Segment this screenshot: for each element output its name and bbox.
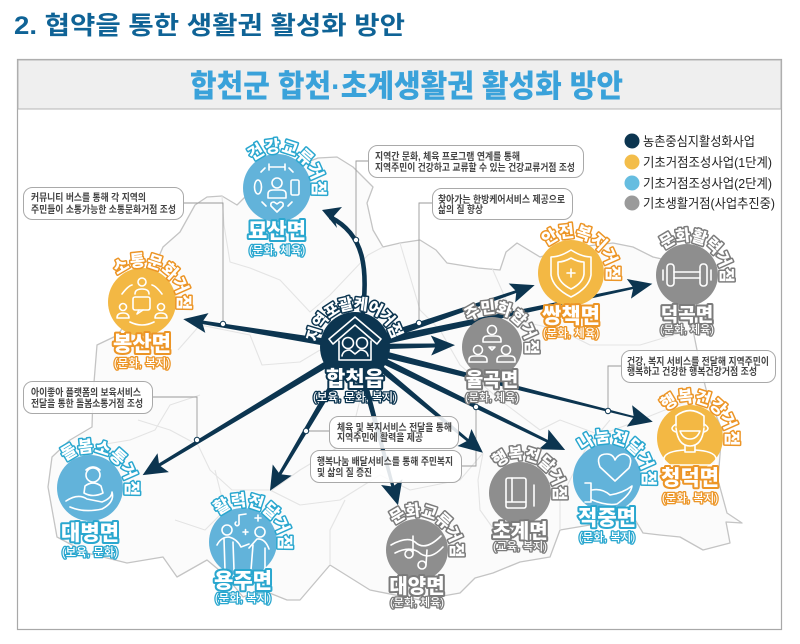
panel header band: 합천군 합천·초계생활권 활성화 방안	[190, 69, 623, 104]
icon: care house	[329, 317, 381, 360]
callout: 활력전달거점	[330, 416, 458, 448]
legend	[624, 134, 775, 211]
icon: music waves	[391, 536, 443, 569]
icon: shield	[551, 250, 591, 297]
panel header band	[18, 60, 781, 109]
arc label: 행복건강거점	[658, 386, 742, 446]
arc label: 행복전달거점	[490, 444, 569, 501]
callout: 행복건강거점: 행복하고 건강한 행복건강거점 조성	[627, 365, 757, 378]
node: 봉산면	[108, 250, 194, 371]
icon: three residents	[469, 326, 515, 362]
legend: 기초거점조성사업(1단계)	[643, 155, 772, 170]
icon: heart in hand	[585, 454, 632, 504]
callout: 소통문화거점	[24, 188, 184, 220]
icon: book and pen	[506, 478, 534, 508]
functions: (문화, 복지)	[215, 592, 271, 605]
arrow: to 율곡면	[355, 335, 455, 357]
arrow: to 대양면	[344, 344, 409, 508]
functions: (문화, 체육)	[390, 596, 444, 609]
functions: (문화, 복지)	[662, 492, 718, 505]
icon: hand holding child	[66, 467, 113, 511]
node: 대병면	[57, 436, 142, 560]
district name: 초계면	[492, 520, 548, 543]
arrow: to 초계면	[348, 339, 490, 461]
arc label: 안전복지거점	[540, 221, 622, 282]
functions: (문화, 복지)	[114, 357, 170, 370]
arc label: 소통문화거점	[112, 250, 194, 310]
arrow: to 용주면	[261, 341, 364, 496]
callout: 활력전달거점: 체육 및 복지서비스 전달을 통해	[337, 421, 452, 434]
map of Hapcheon county	[48, 157, 742, 600]
icon: wellness ring	[254, 164, 299, 212]
icon: community	[117, 278, 167, 325]
callout: 돌봄소통거점: 아이좋아 플랫폼의 보육서비스	[31, 386, 141, 399]
functions: (보육, 문화)	[62, 546, 118, 559]
icon: person with mask	[664, 410, 716, 465]
node: 합천읍	[305, 294, 404, 405]
node: 청덕면	[657, 386, 742, 506]
arrow: to 쌍책면	[352, 276, 538, 356]
node: 율곡면	[462, 298, 541, 405]
functions: (문화, 체육)	[465, 391, 519, 404]
arc label: 활력전달거점	[210, 490, 294, 550]
callout: 돌봄소통거점: 전달을 통한 돌봄소통거점 조성	[31, 397, 143, 410]
callout: 건강교류거점	[368, 146, 584, 178]
district name: 봉산면	[113, 333, 171, 356]
arrow: to 청덕면	[352, 336, 655, 432]
callout: 행복건강거점: 건강, 복지 서비스를 전달해 지역주민이	[627, 355, 769, 368]
callout: 건강교류거점: 지역간 문화, 체육 프로그램 연계를 통해	[375, 150, 520, 163]
callout: 한방케어서비스: 찾아가는 한방케어서비스 제공으로	[438, 193, 565, 206]
arrow: to 덕곡면	[353, 274, 654, 357]
node: 묘산면	[243, 136, 328, 258]
leader junction dots	[194, 237, 611, 443]
district name: 덕곡면	[661, 304, 713, 326]
arrow: to 대병면	[137, 338, 361, 485]
district name: 용주면	[214, 570, 272, 593]
node: 적중면	[573, 428, 658, 545]
functions: (문화, 체육)	[249, 244, 305, 257]
callout: 행복전달거점: 행복나눔 배달서비스를 통해 주민복지	[317, 455, 453, 468]
arrow: to 묘산면	[322, 207, 365, 320]
callout: 행복전달거점	[310, 450, 462, 482]
callout: 소통문화거점: 주민들이 소통가능한 소통문화거점 조성	[31, 203, 176, 216]
district name: 율곡면	[466, 369, 518, 391]
arc label: 주민화합거점	[462, 298, 541, 355]
node: 덕곡면	[656, 226, 736, 337]
functions: (문화, 복지)	[579, 531, 635, 544]
arc label: 문화교류거점	[388, 500, 466, 558]
district name: 대병면	[61, 522, 119, 545]
functions: (교육, 복지)	[493, 540, 547, 553]
callout: 건강교류거점: 지역주민이 건강하고 교류할 수 있는 건강교류거점 조성	[375, 161, 575, 174]
callout: 한방케어서비스: 삶의 질 향상	[438, 203, 483, 216]
callout: 활력전달거점: 지역주민에 활력을 제공	[337, 431, 423, 444]
arrow: to 적중면	[350, 337, 570, 460]
functions: (문화, 체육)	[660, 323, 714, 336]
icon: dumbbell	[663, 264, 711, 286]
arc label: 나눔전달거점	[575, 428, 658, 486]
arc label: 돌봄소통거점	[58, 436, 142, 496]
callout: 한방케어서비스	[432, 188, 572, 220]
district name: 청덕면	[661, 467, 719, 490]
district name: 적중면	[578, 507, 636, 530]
page heading: 2. 협약을 통한 생활권 활성화 방안	[14, 12, 405, 40]
node: 쌍책면	[538, 221, 622, 341]
district name: 묘산면	[248, 220, 306, 243]
district name: 대양면	[389, 575, 445, 598]
callout: 소통문화거점: 커뮤니티 버스를 통해 각 지역의	[31, 191, 146, 204]
callout: 돌봄소통거점	[24, 382, 152, 414]
arc label: 지역포괄케어거점	[305, 294, 404, 341]
legend: 기초거점조성사업(2단계)	[643, 176, 772, 191]
leader lines from callouts	[152, 161, 621, 466]
callout: 행복전달거점: 및 삶의 질 증진	[317, 466, 372, 479]
legend: 농촌중심지활성화사업	[643, 134, 755, 149]
district name: 쌍책면	[542, 305, 600, 328]
functions: (보육, 문화, 복지)	[313, 391, 397, 404]
arrow: to 봉산면	[182, 309, 357, 357]
functions: (문화, 체육)	[543, 327, 599, 340]
icon: dancing people	[217, 514, 269, 570]
district name: 합천읍	[326, 368, 384, 391]
node: 초계면	[489, 444, 569, 554]
node: 대양면	[386, 500, 466, 610]
arc label: 건강교류거점	[245, 136, 328, 196]
node: 용주면	[209, 490, 294, 606]
arc label: 문화활력거점	[658, 226, 736, 283]
callout: 행복건강거점	[622, 350, 776, 382]
legend: 기초생활거점(사업추진중)	[643, 196, 775, 211]
